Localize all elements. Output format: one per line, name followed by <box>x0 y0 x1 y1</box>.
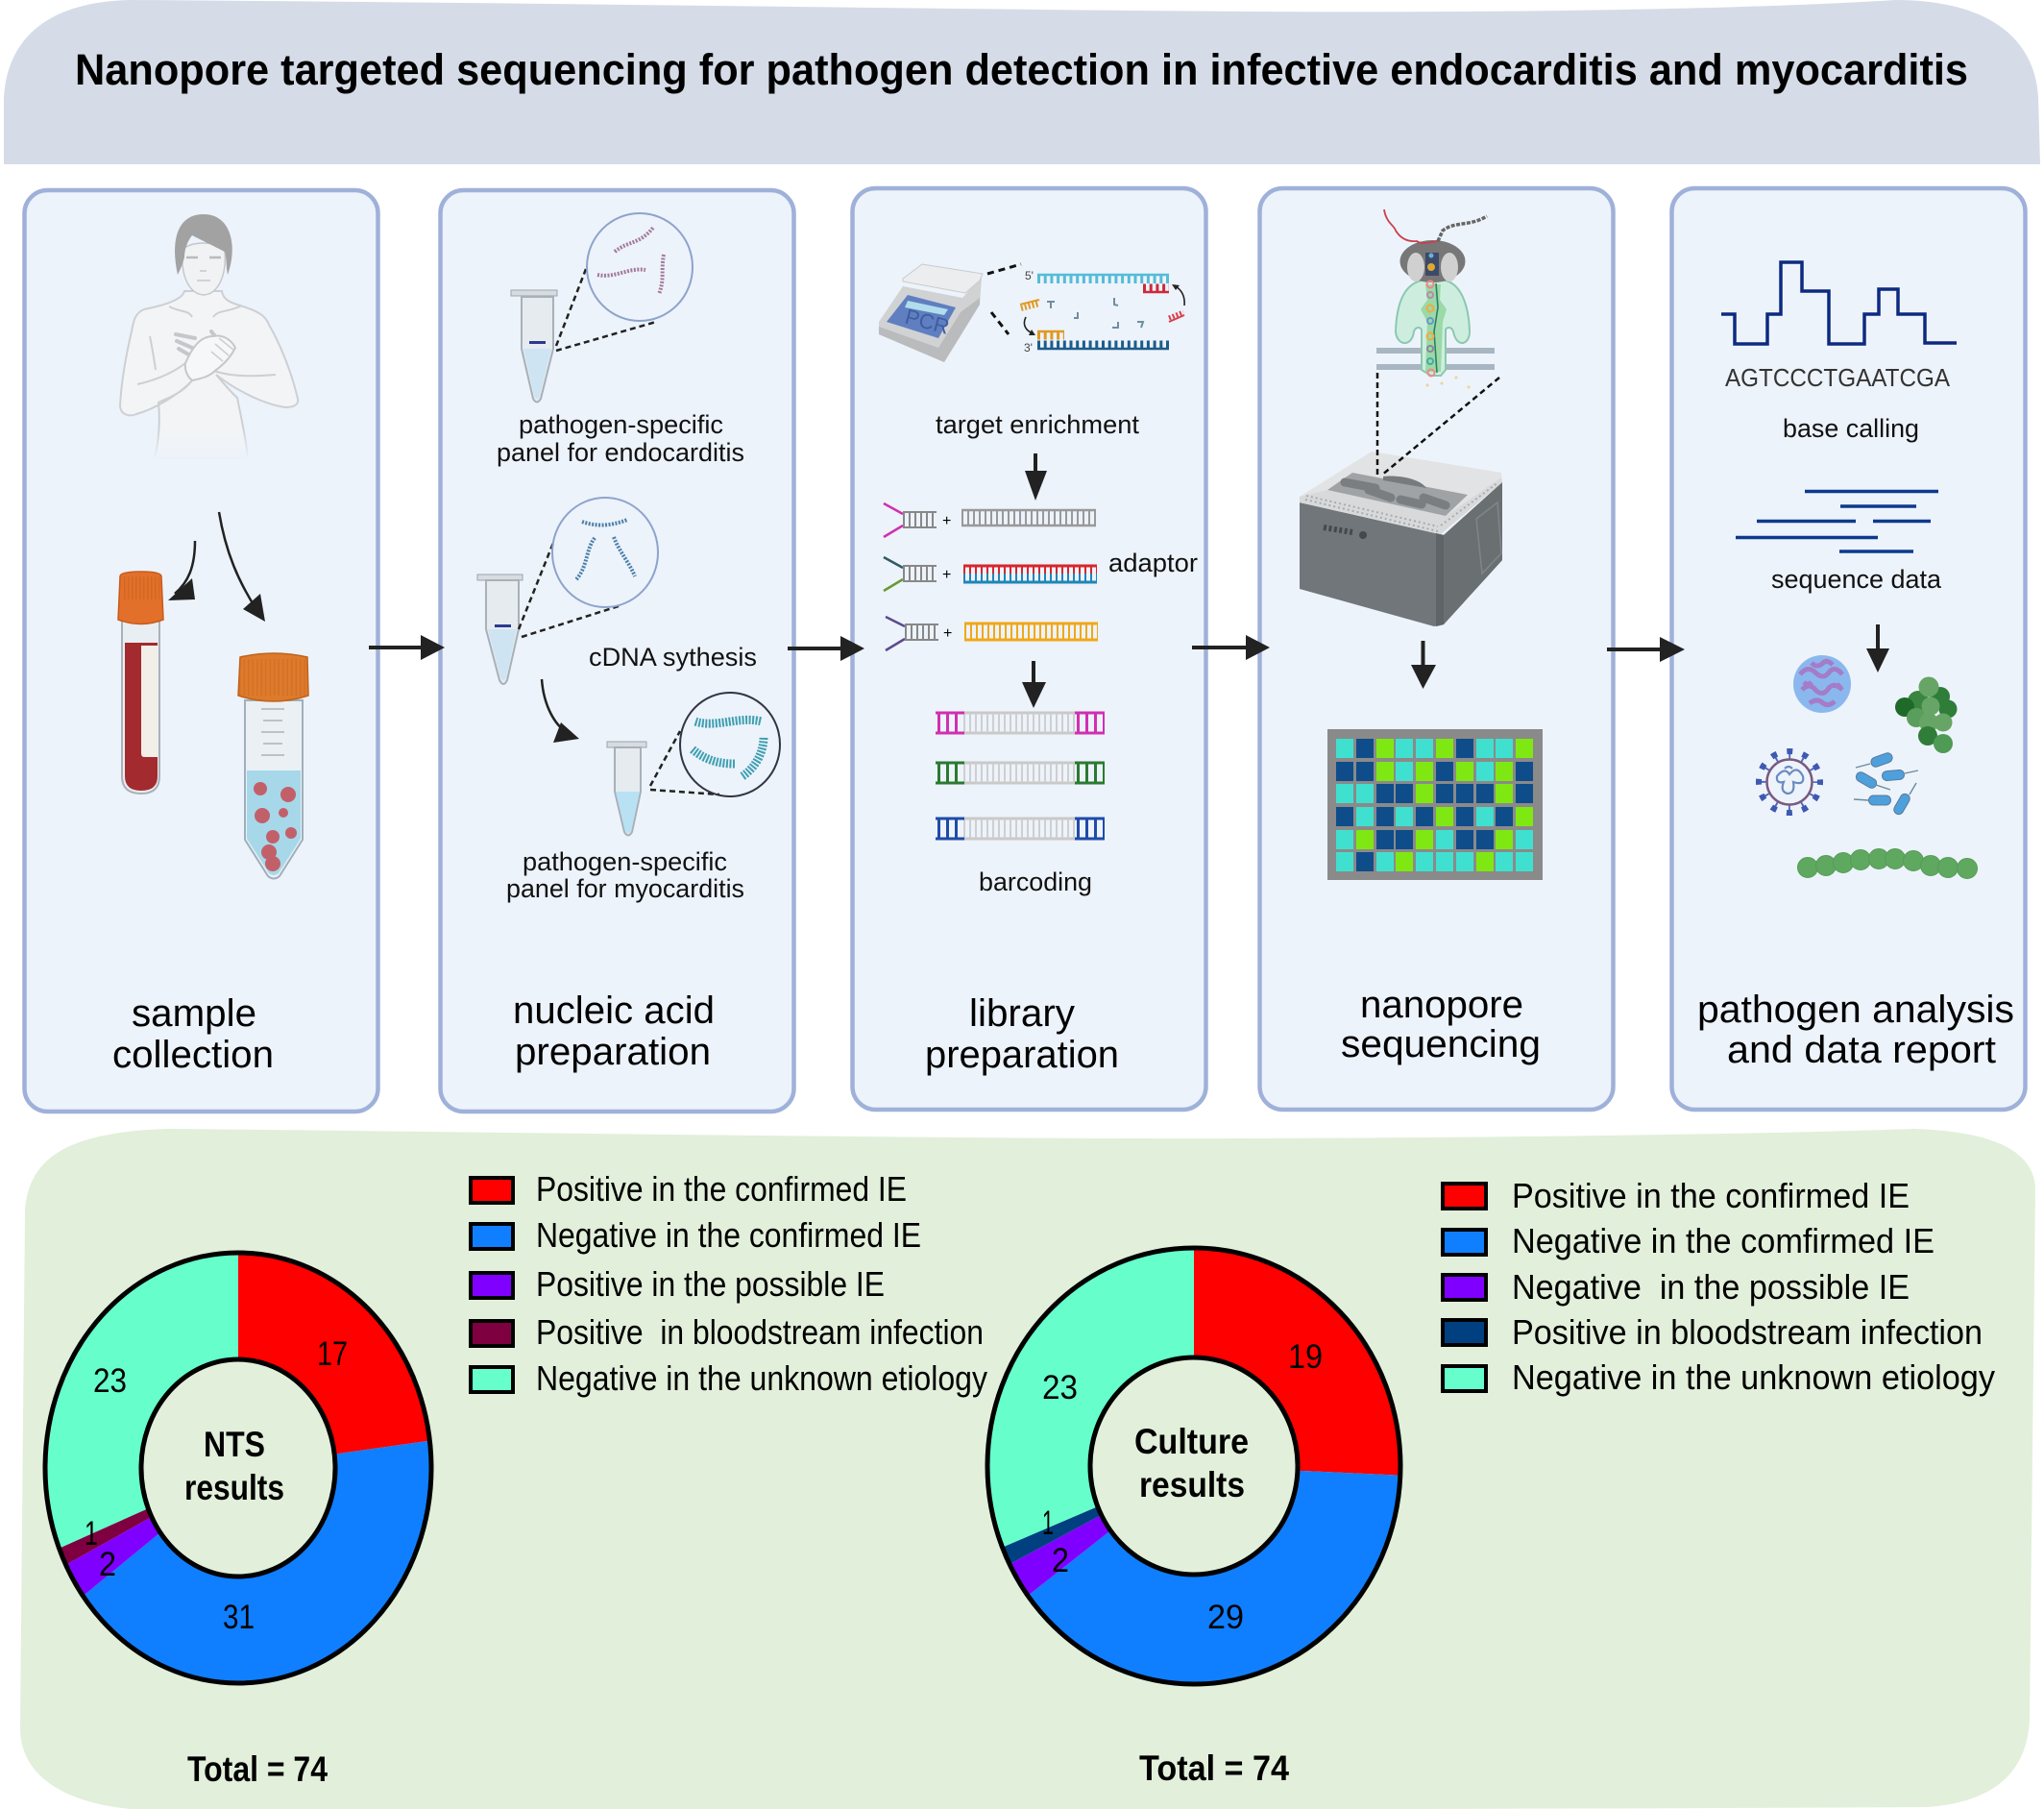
chart: NTS donut: 31 <box>223 1599 255 1636</box>
label: myocarditis panel: pathogen-specific <box>523 847 727 876</box>
icon: virus <box>1759 751 1820 813</box>
legend: NTS <box>471 1169 987 1398</box>
legend: culture: Positive in the confirmed IE <box>1512 1176 1910 1215</box>
chart: adaptor ligation <box>884 503 1098 650</box>
panel: pathogen analysis <box>1671 188 2025 1110</box>
chart: NTS donut <box>45 1253 431 1683</box>
chart: NTS donut: results <box>184 1468 284 1507</box>
label: culture total: Total = 74 <box>1139 1748 1289 1788</box>
icon: streptococcus chain <box>1798 849 1977 878</box>
heading: nanopore sequencing <box>1341 984 1541 1065</box>
panel: sample collection <box>25 190 378 1112</box>
heading: nucleic acid preparation <box>513 990 715 1073</box>
chart: culture donut: 29 <box>1207 1599 1244 1636</box>
arrow: to pathogens <box>1866 624 1889 672</box>
panel: library preparation <box>853 188 1206 1110</box>
heading: pathogen analysis <box>1697 989 2014 1071</box>
legend: culture <box>1443 1176 1995 1397</box>
icon: nanopore protein <box>1376 209 1495 388</box>
dashed zoom lines <box>1377 373 1499 476</box>
heading: sample collection: collection <box>112 1034 274 1076</box>
icon: PCR machine <box>879 264 1021 362</box>
title banner <box>4 0 2040 164</box>
legend: NTS: Negative in the confirmed IE <box>536 1215 921 1255</box>
chart: base-calling signal trace <box>1721 262 1957 344</box>
chart: NTS donut: 23 <box>93 1362 127 1400</box>
chart: PCR target enrichment: 3' <box>1024 341 1033 354</box>
arrow: to data matrix <box>1411 641 1436 689</box>
arrow: to barcodes <box>1022 661 1046 708</box>
chart: barcoded fragments <box>936 713 1105 839</box>
arrow: to blood tube <box>168 541 195 600</box>
legend: culture: Negative in the possible IE <box>1512 1267 1910 1307</box>
chart: NTS donut: NTS <box>204 1425 265 1464</box>
icon: endocarditis panel tube <box>511 213 693 402</box>
legend: culture: Negative in the unknown etiology <box>1512 1357 1995 1397</box>
chart: culture donut: 19 <box>1288 1338 1323 1376</box>
chart: culture donut: 2 <box>1052 1542 1069 1579</box>
heading: nanopore sequencing: nanopore <box>1360 984 1523 1026</box>
icon: spherical pathogen <box>1793 655 1851 713</box>
chart: culture donut <box>987 1248 1400 1684</box>
heading: sample collection: sample <box>132 992 256 1035</box>
chart: PCR target enrichment <box>1020 269 1184 354</box>
heading: sample collection <box>112 992 274 1076</box>
chart: PCR target enrichment: 5' <box>1025 269 1034 282</box>
legend: NTS: Positive in bloodstream infection <box>536 1312 984 1352</box>
icon: tissue tube <box>238 653 308 878</box>
title: Nanopore targeted sequencing for pathogen detection in infective endocarditis and myocarditis <box>75 45 1968 94</box>
label: base calling: base calling <box>1783 414 1919 443</box>
heading: nanopore sequencing: sequencing <box>1341 1023 1541 1065</box>
chart: culture donut: 1 <box>1042 1504 1054 1542</box>
icon: bacilli <box>1854 751 1918 816</box>
arrow: collection to extraction <box>369 635 445 660</box>
label: sequence data: sequence data <box>1771 565 1942 594</box>
chart: adaptor ligation: + <box>943 625 952 642</box>
label: cDNA synthesis: cDNA sythesis <box>589 643 757 672</box>
label: adaptor: adaptor <box>1108 549 1198 577</box>
icon: PCR machine: PCR <box>903 305 952 339</box>
chart: culture donut: 23 <box>1042 1369 1078 1406</box>
chart: NTS donut: 17 <box>317 1335 348 1373</box>
legend: NTS: Negative in the unknown etiology <box>536 1358 987 1398</box>
arrow: sequencing to analysis <box>1607 637 1685 662</box>
legend: culture: Positive in bloodstream infection <box>1512 1312 1983 1352</box>
icon: sequencer <box>1300 452 1502 626</box>
label: myocarditis panel: panel for myocarditis <box>506 874 744 903</box>
legend: culture: Negative in the comfirmed IE <box>1512 1221 1934 1260</box>
arrow: extraction to library <box>788 636 864 661</box>
label: endocarditis panel <box>497 410 744 467</box>
label: endocarditis panel: pathogen-specific <box>519 410 723 439</box>
chart: signal matrix <box>1327 729 1543 880</box>
label: endocarditis panel: panel for endocarditis <box>497 438 744 467</box>
label: target enrichment: target enrichment <box>936 410 1140 439</box>
label: myocarditis panel <box>506 847 744 903</box>
heading: library preparation: preparation <box>925 1034 1119 1076</box>
heading: pathogen analysis: and data report <box>1727 1029 1996 1071</box>
legend: NTS: Positive in the confirmed IE <box>536 1169 907 1209</box>
chart: culture donut: results <box>1139 1465 1245 1504</box>
heading: library preparation: library <box>969 992 1075 1035</box>
panel: nanopore sequencing <box>1260 188 1614 1110</box>
heading: nucleic acid preparation: preparation <box>515 1031 711 1073</box>
chart: culture donut: Culture <box>1134 1422 1249 1461</box>
heading: library preparation <box>925 992 1119 1076</box>
panel: nucleic acid preparation <box>440 190 793 1112</box>
chart: NTS donut: 2 <box>99 1546 116 1583</box>
heading: pathogen analysis: pathogen analysis <box>1697 989 2014 1031</box>
chart: adaptor ligation: + <box>942 513 951 529</box>
heading: nucleic acid preparation: nucleic acid <box>513 990 715 1032</box>
legend: NTS: Positive in the possible IE <box>536 1264 885 1304</box>
panel: results <box>20 1129 2035 1809</box>
arrow: library to sequencing <box>1192 635 1270 660</box>
icon: myocarditis panel tube <box>607 693 780 836</box>
arrow: to myocarditis tube <box>542 679 579 743</box>
chart: adaptor ligation: + <box>942 567 951 583</box>
icon: blood tube <box>118 572 163 794</box>
label: barcoding: barcoding <box>979 868 1092 896</box>
arrow: to tissue tube <box>219 512 265 622</box>
icon: patient <box>120 214 298 460</box>
label: NTS total: Total = 74 <box>187 1749 328 1789</box>
arrow: to adaptors <box>1025 453 1047 501</box>
label: base sequence: AGTCCCTGAATCGA <box>1725 363 1951 392</box>
icon: coccus cluster <box>1895 676 1958 753</box>
icon: cDNA tube <box>477 498 658 684</box>
chart: NTS donut: 1 <box>85 1515 98 1552</box>
chart: sequence reads <box>1736 492 1938 551</box>
